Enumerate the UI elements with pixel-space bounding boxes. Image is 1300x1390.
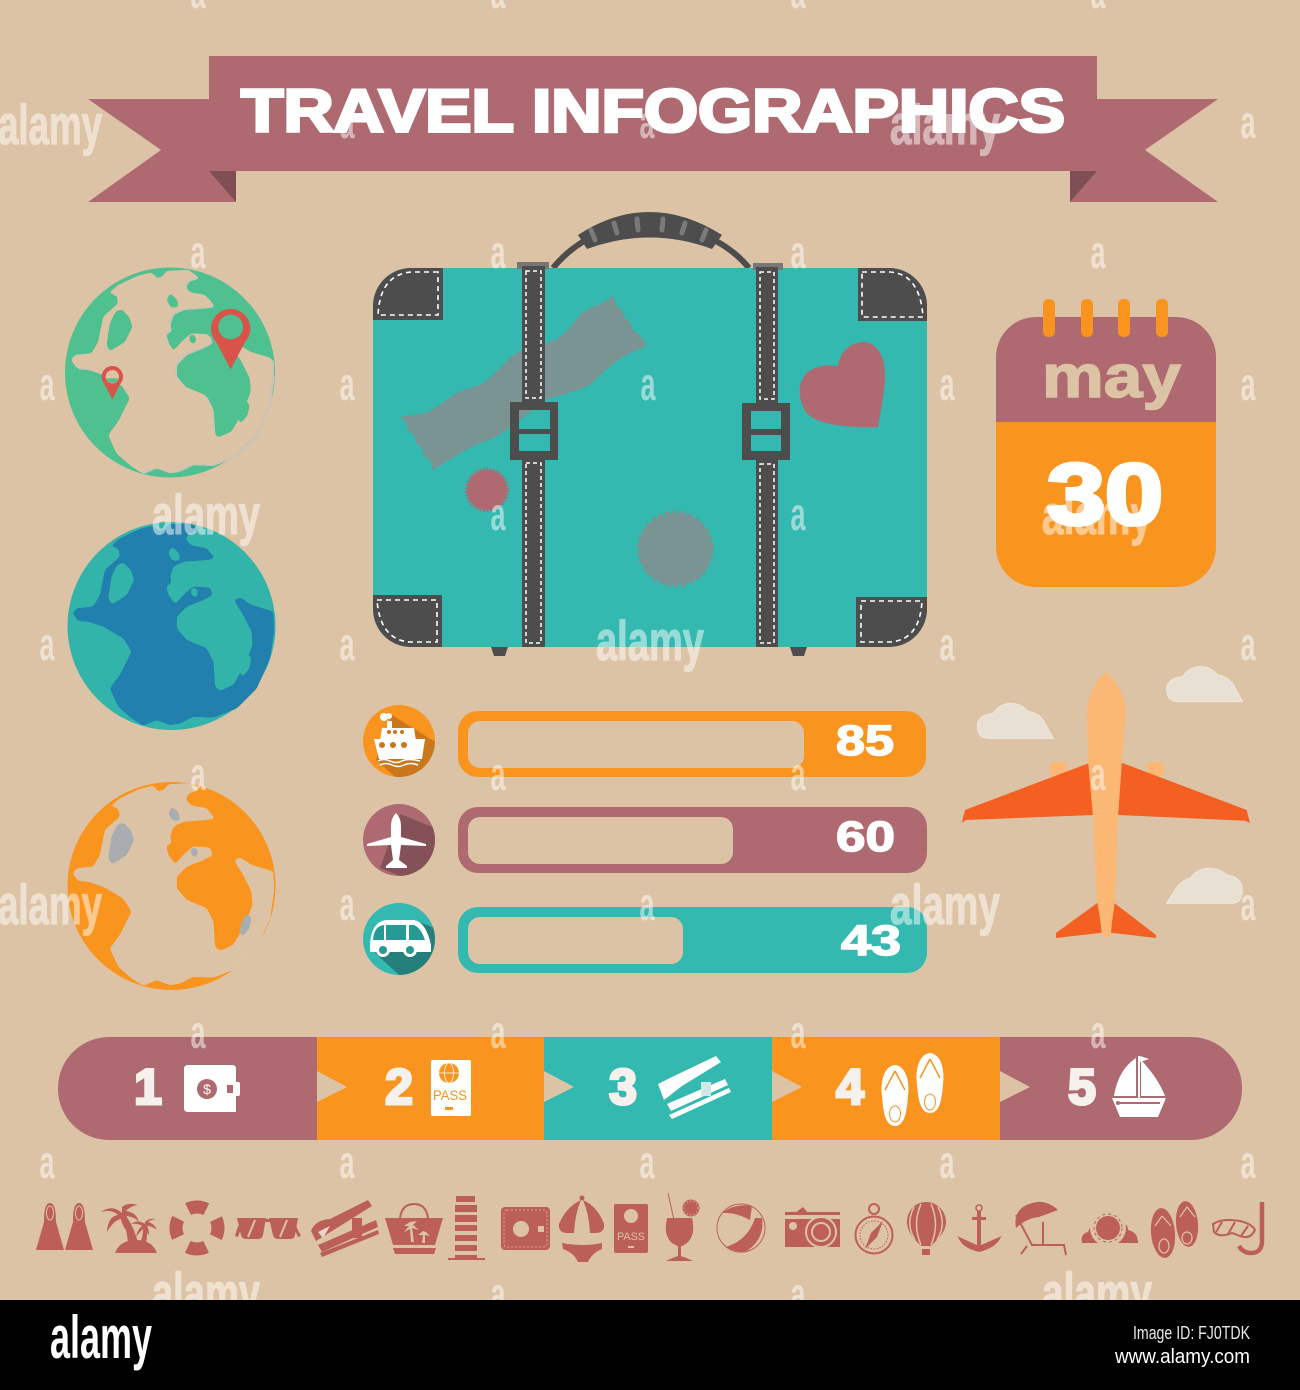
icon: lifebuoy [176, 1207, 218, 1249]
globe: blue and teal [68, 522, 276, 730]
icon: sunglasses [235, 1218, 301, 1239]
watermark: alamy [596, 609, 704, 672]
icon: beach ball [717, 1204, 765, 1252]
map pin: large [211, 309, 250, 369]
icon: camera [785, 1207, 840, 1247]
step arrows [317, 1071, 1030, 1102]
watermark: a [340, 618, 355, 670]
corner patches [370, 266, 930, 649]
watermark: a [190, 226, 206, 278]
icon: sailboat [1112, 1056, 1166, 1117]
watermark: a [640, 358, 656, 410]
steps strip [58, 1037, 1242, 1140]
stat: bus 43 [363, 903, 927, 975]
value 85: 85 [836, 717, 894, 765]
icon: bikini [559, 1196, 604, 1262]
case body [373, 268, 927, 647]
icon: sun with cloud [1082, 1210, 1138, 1246]
icon: fins [36, 1203, 93, 1250]
icon: plane [363, 804, 435, 876]
watermark: a [640, 878, 655, 930]
stat: ship 85 [363, 705, 926, 777]
step 1 number: 1 [134, 1059, 162, 1115]
globe: green with map pins [65, 268, 275, 478]
step 3 number: 3 [609, 1059, 637, 1115]
step 5 number: 5 [1068, 1059, 1096, 1115]
corner stitching [377, 272, 923, 642]
watermark: a [1090, 1006, 1106, 1058]
icon: wallet: $ [203, 1081, 211, 1097]
stat: plane 60 [363, 804, 927, 880]
icon: passport [431, 1060, 471, 1116]
watermark: a [340, 1136, 355, 1188]
footer bar [0, 1300, 1300, 1390]
watermark: a [40, 358, 55, 410]
watermark: a [940, 618, 955, 670]
watermark: a [490, 1006, 506, 1058]
icon: tickets [311, 1200, 379, 1257]
watermark: a [940, 358, 955, 410]
watermark: alamy [0, 873, 102, 936]
watermark: a [640, 1136, 655, 1188]
engines [1050, 762, 1164, 776]
sticker: heart [800, 342, 885, 427]
feet [491, 647, 807, 656]
watermark: a [1240, 96, 1256, 148]
watermark: a [1240, 618, 1256, 670]
watermark: alamy [1042, 483, 1152, 546]
airplane with clouds [962, 667, 1250, 938]
title: TRAVEL INFOGRAPHICS [241, 78, 1065, 144]
footer logo: alamy [50, 1304, 152, 1371]
icon: palm island [101, 1204, 157, 1253]
watermark: a [1240, 878, 1256, 930]
watermark: alamy [890, 873, 1000, 936]
calendar [996, 299, 1216, 587]
left strap [510, 262, 558, 647]
step 2 number: 2 [385, 1059, 413, 1115]
watermark: a [490, 488, 506, 540]
step 4 number: 4 [836, 1059, 864, 1115]
title ribbon [88, 56, 1218, 202]
watermark: alamy [890, 93, 1000, 156]
watermark: a [340, 358, 355, 410]
icon: passport: PASS [433, 1087, 467, 1103]
watermark: a [490, 1268, 506, 1320]
watermark: a [190, 748, 206, 800]
image id: Image ID: FJ0TDK [1133, 1323, 1250, 1343]
sticker: small round seal [466, 469, 508, 511]
icon: ship [363, 705, 435, 777]
bar: 43 [458, 907, 927, 973]
day: 30 [1047, 447, 1163, 543]
globe: orange [68, 782, 276, 990]
watermark: a [790, 488, 806, 540]
icon: passport: PASS [617, 1231, 645, 1243]
calendar rings [1043, 299, 1168, 337]
handle [553, 212, 749, 268]
bar: 60 [458, 807, 927, 873]
bar: 85 [458, 711, 926, 777]
sticker: large round seal [638, 512, 712, 586]
icon: wallet [501, 1207, 550, 1250]
website: www.alamy.com [1114, 1346, 1250, 1368]
watermark: a [790, 1268, 806, 1320]
watermark: alamy [152, 1261, 260, 1324]
watermark: a [40, 1136, 55, 1188]
watermark: a [940, 1136, 955, 1188]
icon: beach umbrella with lounger [1015, 1202, 1066, 1255]
watermark: a [640, 96, 655, 148]
icon: flip-flops [882, 1053, 943, 1126]
watermark: alamy [152, 483, 260, 546]
watermark: alamy [1042, 1261, 1152, 1324]
fuselage [1087, 672, 1126, 937]
watermark: a [490, 226, 506, 278]
watermark: a [790, 1006, 806, 1058]
wings [962, 763, 1094, 823]
map pin: small [102, 366, 123, 399]
watermark: a [490, 748, 506, 800]
value 43: 43 [841, 917, 901, 965]
icon: cocktail [666, 1193, 700, 1261]
watermark: alamy [0, 93, 102, 156]
icon: compass [856, 1204, 892, 1254]
watermark: a [190, 1006, 206, 1058]
watermark: a [340, 878, 355, 930]
watermark: a [790, 226, 806, 278]
icon: flip-flops small [1149, 1200, 1200, 1259]
icon: wallet [184, 1065, 240, 1112]
watermark: a [1240, 1136, 1256, 1188]
icon: beach bag [385, 1204, 443, 1254]
icon: tickets [658, 1056, 731, 1119]
suitcase [370, 212, 930, 656]
watermark: a [1240, 358, 1256, 410]
icon: hot air balloon [907, 1202, 946, 1255]
icon: anchor [957, 1205, 1002, 1252]
watermark: a [1090, 748, 1106, 800]
watermark: a [340, 96, 355, 148]
watermark: a [1090, 226, 1106, 278]
month: may [1042, 343, 1182, 410]
right strap [742, 263, 790, 647]
icon row [36, 1193, 1262, 1262]
icon: snorkel mask [1213, 1202, 1262, 1253]
value 60: 60 [836, 813, 895, 861]
watermark: a [790, 748, 806, 800]
watermark: a [40, 618, 55, 670]
icon: passport [614, 1204, 648, 1253]
sticker: grey ribbon [400, 295, 647, 470]
icon: bus [363, 903, 435, 975]
clouds [977, 667, 1243, 903]
icon: leaning tower [448, 1196, 485, 1260]
tail [1056, 902, 1102, 938]
